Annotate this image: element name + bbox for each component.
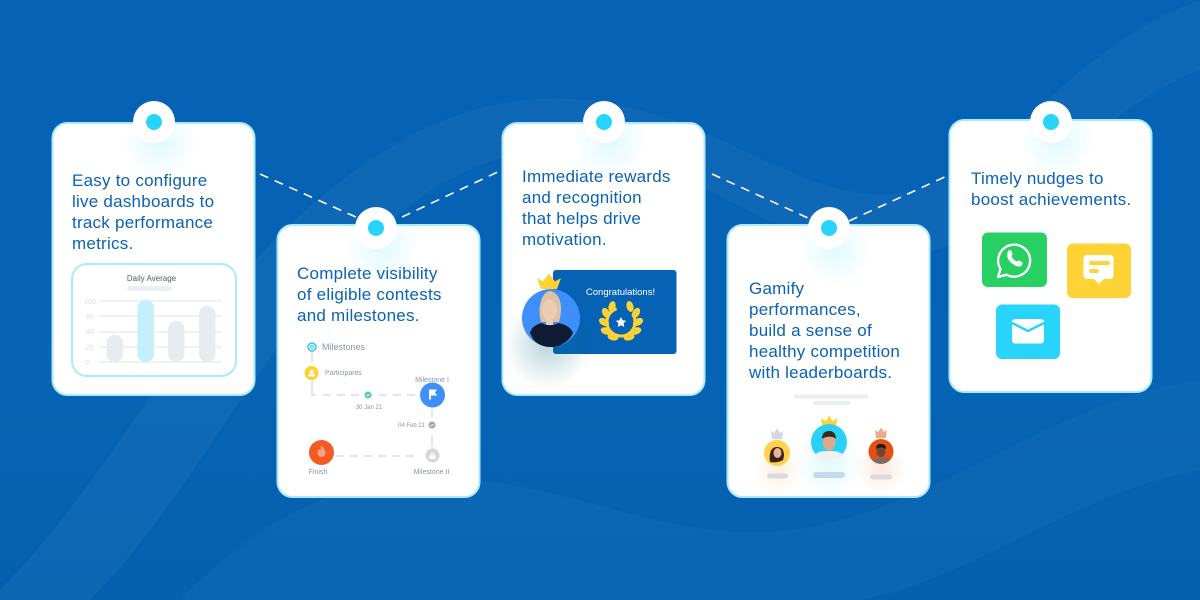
card background — [278, 225, 480, 497]
bar chart: 20 — [86, 345, 94, 352]
bar chart: 100 — [84, 299, 96, 306]
icon: whatsapp — [982, 232, 1047, 287]
panel: dashboards — [52, 101, 254, 395]
panel: milestones — [278, 207, 480, 497]
text block: Gamify — [749, 279, 805, 298]
milestone timeline: Finish — [309, 469, 327, 476]
panel: leaderboards — [728, 207, 930, 498]
pin — [132, 101, 188, 170]
icon: lock — [426, 448, 440, 462]
milestone timeline: Participants — [325, 370, 362, 377]
text block: Timely nudges to — [971, 169, 1104, 188]
milestone timeline: 04 Feb 21 — [398, 423, 426, 429]
label bar — [767, 474, 788, 478]
milestone timeline: Milestone II — [414, 469, 449, 476]
milestone timeline: Milestone I — [415, 377, 449, 384]
pin — [1029, 101, 1084, 168]
label bar — [813, 472, 845, 478]
icon: message — [1067, 244, 1131, 298]
bar chart: 80 — [86, 314, 94, 321]
icon: milestones target — [308, 343, 316, 351]
pin — [807, 207, 862, 276]
connector: dashed lines — [260, 170, 949, 221]
card background — [728, 225, 930, 497]
text block: Immediate rewards — [522, 167, 671, 186]
shadow glow — [504, 301, 592, 389]
text block: live dashboards to — [72, 192, 214, 211]
text block: motivation. — [522, 230, 607, 249]
leaderboard placeholder lines — [794, 394, 868, 405]
icon: check — [364, 392, 372, 398]
text block: track performance — [72, 213, 213, 232]
avatar: woman with crown — [522, 274, 580, 347]
panel: nudges — [950, 101, 1152, 392]
icon: laurel wreath — [597, 300, 645, 342]
text block: and milestones. — [297, 306, 420, 325]
text block: metrics. — [72, 234, 133, 253]
icon: participants — [304, 366, 318, 380]
icon: verified — [428, 422, 436, 428]
avatar: first place — [811, 416, 847, 460]
avatar: second place — [764, 428, 790, 466]
congratulations card — [504, 270, 676, 389]
bar chart: 40 — [86, 329, 94, 336]
milestone timeline: Milestones — [322, 342, 366, 352]
text block: of eligible contests — [297, 285, 442, 304]
text block: build a sense of — [749, 321, 872, 340]
avatar: third place — [868, 428, 894, 464]
text block: healthy competition — [749, 342, 900, 361]
text block: Complete visibility — [297, 264, 438, 283]
label bar — [870, 474, 892, 480]
text block: boost achievements. — [971, 190, 1131, 209]
text block: Easy to configure — [72, 171, 207, 190]
congratulations card: Congratulations! — [586, 287, 655, 298]
icon: email — [996, 304, 1060, 359]
card background — [502, 123, 704, 395]
card background — [950, 120, 1152, 392]
text block: and recognition — [522, 188, 642, 207]
leaderboard glows — [751, 426, 907, 498]
bar chart: Daily Average — [127, 274, 177, 283]
pin — [582, 101, 638, 170]
card background — [52, 123, 254, 395]
text block: that helps drive — [522, 209, 641, 228]
bar chart: 0 — [85, 360, 89, 367]
bar chart — [72, 264, 236, 376]
milestone timeline: 30 Jan 21 — [356, 405, 383, 411]
text block: performances, — [749, 300, 861, 319]
icon: flame — [309, 440, 334, 465]
text block: with leaderboards. — [748, 363, 892, 382]
milestone timeline — [304, 342, 449, 476]
panel: rewards — [502, 101, 704, 395]
pin — [354, 207, 410, 274]
icon: flag — [420, 382, 445, 408]
